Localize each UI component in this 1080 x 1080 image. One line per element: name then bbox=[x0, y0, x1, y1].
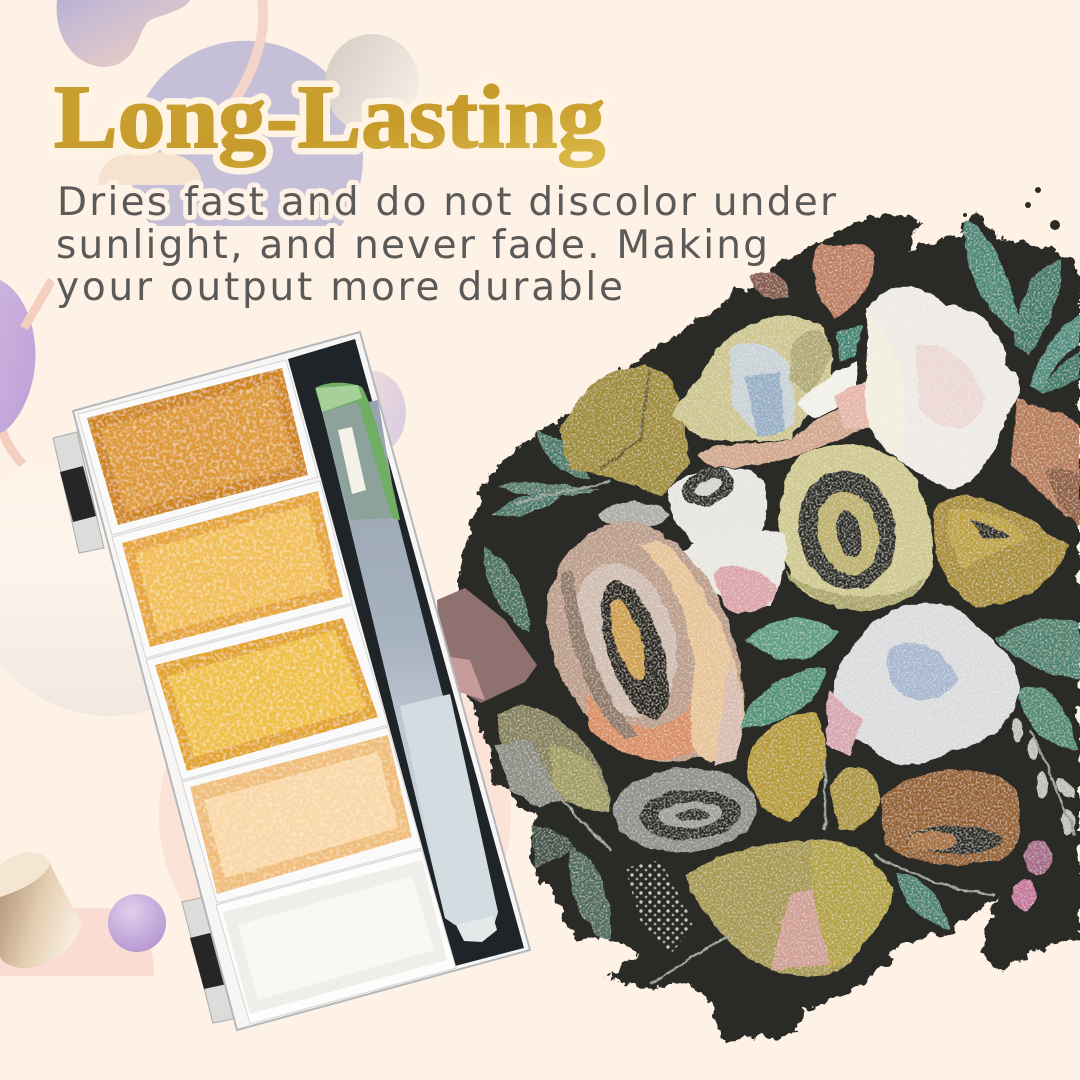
yellow buds bbox=[748, 712, 881, 830]
gold rose right bbox=[933, 496, 1069, 607]
white lily top right bbox=[865, 286, 1020, 490]
translucent overlap shape bbox=[437, 588, 537, 703]
pan 3 bbox=[146, 605, 388, 780]
cap top highlight bbox=[316, 385, 362, 412]
large olive flower bottom bbox=[686, 839, 893, 976]
pan 1 bbox=[78, 360, 318, 535]
olive leafy flower left bbox=[495, 706, 610, 812]
water brush pen bbox=[315, 383, 498, 942]
cylinder and sphere decoration bbox=[0, 852, 166, 976]
text lines: sunlight, and never fade. Making bbox=[56, 223, 768, 268]
pan 5 bbox=[216, 850, 456, 1024]
olive flower left bbox=[558, 365, 688, 497]
silver blue flower bbox=[826, 603, 1019, 765]
left sprig leaves bbox=[484, 430, 600, 632]
white swirl rose bbox=[668, 461, 786, 613]
grey rose bottom bbox=[611, 764, 759, 856]
white bristle bbox=[338, 427, 366, 494]
pan 2 bbox=[112, 481, 352, 658]
cream flower with blue centre bbox=[673, 316, 880, 467]
flower painting details bbox=[484, 220, 1080, 985]
silver leaflets bbox=[1012, 718, 1077, 836]
text halo: sunlight, and never fade. Making bbox=[56, 223, 768, 268]
black paint swatch bbox=[458, 212, 1080, 1043]
decorative background shapes bbox=[0, 0, 511, 991]
left hinge top bbox=[53, 432, 104, 553]
clear lower tube bbox=[400, 694, 498, 928]
green grey leaves bottom left bbox=[532, 825, 611, 940]
painted floral artwork bbox=[458, 187, 1080, 1043]
black compartment bbox=[288, 339, 524, 966]
green leaf lower right bbox=[897, 873, 950, 930]
title: Long-Lasting bbox=[54, 68, 605, 167]
translucent cap window bbox=[322, 402, 392, 520]
palette tray bbox=[53, 332, 530, 1030]
text halo bbox=[56, 180, 837, 310]
text lines: Dries fast and do not discolor under bbox=[57, 180, 837, 225]
pen end cap bbox=[456, 916, 497, 942]
title: Long-Lasting bbox=[54, 68, 605, 167]
text lines bbox=[56, 180, 837, 310]
description text bbox=[56, 180, 837, 310]
yellow rose centre bbox=[779, 445, 933, 611]
top peach tulip bbox=[749, 243, 875, 362]
text lines: your output more durable bbox=[56, 265, 623, 310]
tray outer case bbox=[73, 332, 530, 1030]
pen body bbox=[322, 400, 498, 928]
thin stems bbox=[515, 480, 1075, 985]
right green leaves bbox=[995, 619, 1080, 750]
brown rose bbox=[880, 770, 1052, 911]
paint splatter specks bbox=[963, 187, 1075, 267]
pan 4 bbox=[182, 727, 422, 903]
left hinge bottom bbox=[182, 896, 238, 1023]
text halo: your output more durable bbox=[56, 265, 623, 310]
teal leaves centre bbox=[740, 618, 838, 727]
green cap bbox=[315, 383, 400, 520]
speckled filler flowers bbox=[625, 860, 695, 955]
terracotta rose right bbox=[1010, 398, 1080, 525]
top right green leaves bbox=[964, 220, 1080, 392]
grey petal bbox=[598, 502, 670, 529]
text halo: Dries fast and do not discolor under bbox=[57, 180, 837, 225]
pink orange rose bbox=[547, 522, 745, 765]
